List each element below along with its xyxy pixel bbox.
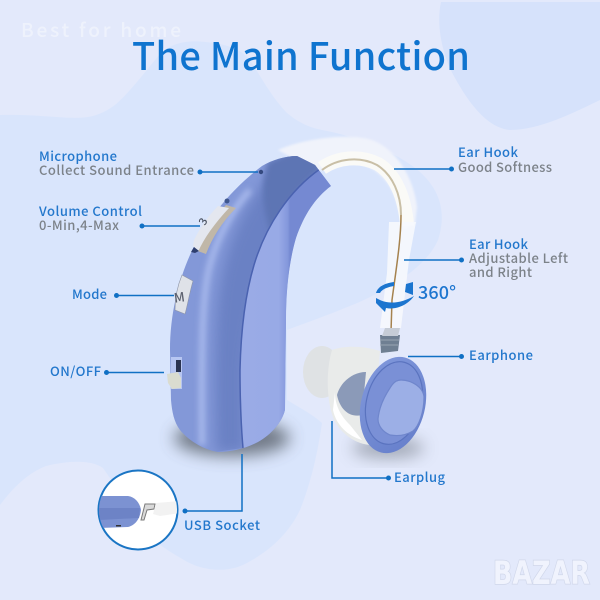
earplug (303, 346, 380, 445)
callout: Volume Control: Volume Control (38, 201, 142, 220)
microphone hole (259, 170, 263, 174)
callout: USB Socket: USB Socket (184, 515, 260, 534)
title: The Main Function (132, 26, 470, 81)
callout: Ear Hook softness (394, 142, 552, 176)
body (165, 150, 335, 460)
mode button (173, 275, 193, 314)
shadow under earphone (352, 438, 424, 458)
callout: Mode (72, 284, 174, 303)
callout: Ear Hook adjustable: and Right (469, 262, 532, 281)
callout: Ear Hook softness: Ear Hook (458, 142, 519, 161)
earphone (350, 350, 436, 460)
360 label: 360° (418, 279, 456, 305)
callout: Earplug: Earplug (394, 467, 445, 486)
callout: Volume Control: 0-Min,4-Max (39, 215, 119, 234)
callout: Ear Hook adjustable: Ear Hook (469, 234, 529, 253)
callout: Volume Control (38, 201, 200, 234)
callout: Mode: Mode (72, 284, 107, 303)
callout: Earphone (408, 345, 533, 364)
callout: Earphone: Earphone (469, 345, 533, 364)
connector (380, 328, 400, 353)
callout: USB Socket (182, 454, 260, 534)
callout: Microphone: Microphone (39, 146, 117, 165)
360 rotation arrow icon (376, 282, 414, 312)
callout: Ear Hook adjustable (404, 234, 568, 281)
callout: Microphone: Collect Sound Entrance (39, 160, 194, 179)
volume wheel (191, 198, 236, 254)
callout: Earplug (332, 421, 445, 486)
inset: USB socket detail (98, 470, 180, 550)
shadow under body (174, 420, 290, 456)
callout: Ear Hook softness: Good Softness (458, 157, 552, 176)
callout: Microphone (39, 146, 258, 179)
on/off switch (167, 357, 182, 389)
callout: Ear Hook adjustable: Adjustable Left (469, 248, 568, 267)
volume wheel: 3 (194, 215, 211, 228)
ear hook tube (278, 137, 417, 332)
watermark: Best for home: Best for home (21, 16, 181, 43)
callout: ON/OFF: ON/OFF (50, 361, 101, 380)
callout: ON/OFF (50, 361, 164, 380)
product: hearing aid (165, 137, 436, 460)
mode button: M (173, 286, 186, 307)
